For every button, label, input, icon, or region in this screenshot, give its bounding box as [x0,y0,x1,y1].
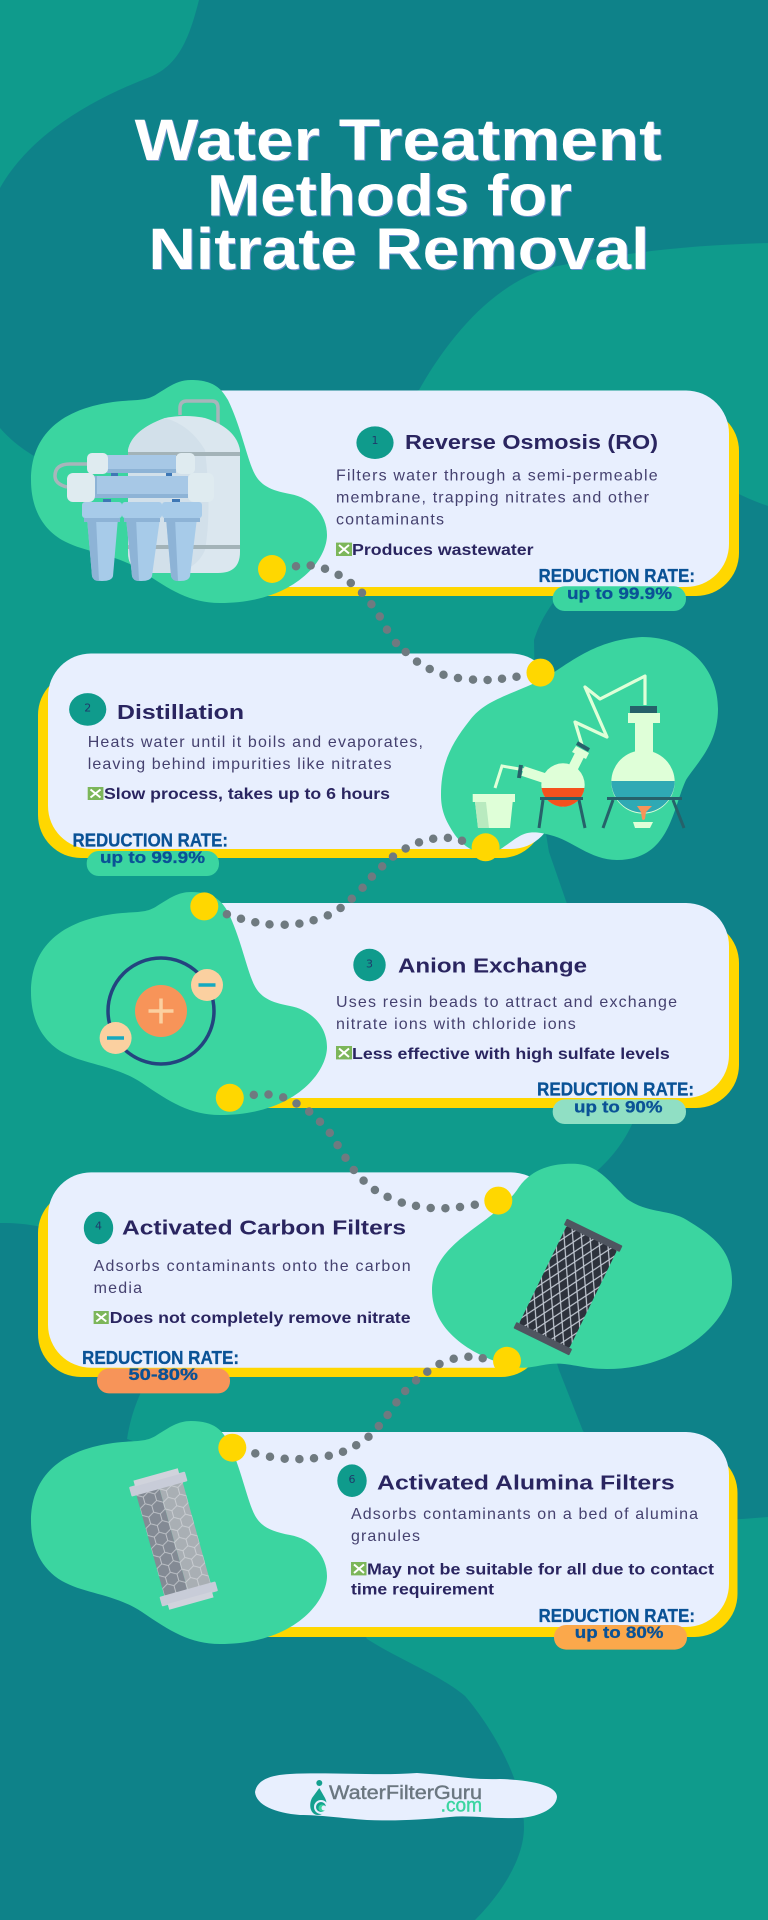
reduction rate: REDUCTION RATE: [538,1606,695,1626]
description [351,1506,698,1545]
reduction rate [72,830,228,876]
drawback: Less effective with high sulfate levels [352,1046,670,1063]
heading: 4 [95,1220,102,1233]
footer logo [255,1773,557,1820]
description: contaminants [336,512,444,529]
description [94,1258,411,1297]
reduction rate: 50-80% [128,1365,198,1384]
title [135,108,662,282]
heading: Anion Exchange [398,956,587,978]
logo wordmark: .com [441,1796,482,1817]
card background [150,903,739,1108]
reduction rate: up to 80% [575,1623,664,1642]
icon: carbon filter cartridge [513,1219,623,1355]
card background [38,654,554,858]
reduction rate: up to 90% [574,1098,662,1116]
heading: 2 [84,701,91,714]
icon: alumina filter cartridge [128,1467,219,1611]
description: leaving behind impurities like nitrates [88,756,391,773]
drawback: Produces wastewater [352,542,534,559]
description: nitrate ions with chloride ions [336,1016,576,1033]
logo wordmark [329,1783,482,1817]
drawback: Slow process, takes up to 6 hours [104,786,390,803]
connector: step 1 to step 2 [258,555,554,687]
heading: Activated Alumina Filters [377,1473,675,1495]
drawback: time requirement [351,1582,494,1599]
description: granules [351,1528,420,1545]
reduction rate: REDUCTION RATE: [72,830,228,850]
panel: distillation [38,637,718,876]
title: Nitrate Removal [148,217,649,282]
logo wordmark: WaterFilterGuru [329,1783,482,1804]
icon: reverse osmosis system [55,401,240,581]
connector: step 3 to step 4 [216,1084,512,1215]
panel: anion exchange [31,892,739,1124]
background: top-left light shape [0,0,199,188]
reduction rate [82,1348,239,1393]
card background [150,390,739,596]
reduction rate: REDUCTION RATE: [82,1348,239,1368]
reduction rate [538,1606,695,1650]
logo icon [310,1780,327,1815]
description [336,994,677,1033]
drawback [351,1562,714,1599]
card background [38,1172,554,1377]
connector: step 2 to step 3 [190,833,500,925]
description: Adsorbs contaminants on a bed of alumina [351,1506,698,1523]
description: Filters water through a semi-permeable [336,468,658,485]
logo background [255,1773,557,1820]
heading: 3 [366,958,373,971]
drawback: Does not completely remove nitrate [110,1310,411,1327]
drawback: May not be suitable for all due to contact [367,1562,714,1579]
heading: 6 [348,1473,356,1486]
heading [337,1464,675,1497]
reduction rate: up to 99.9% [567,584,672,603]
panel: activated alumina filters [31,1421,738,1650]
panel: activated carbon filters [38,1164,732,1393]
description: membrane, trapping nitrates and other [336,490,650,507]
description: Adsorbs contaminants onto the carbon [94,1258,411,1275]
connector: step 4 to step 5 [218,1347,521,1462]
heading [356,426,658,459]
blob [432,1164,732,1369]
reduction rate: up to 99.9% [100,848,205,867]
heading [84,1212,406,1244]
icon: distillation glassware [473,676,684,828]
reduction rate: REDUCTION RATE: [538,566,695,586]
blob [31,380,327,603]
description [88,734,423,773]
heading [69,693,244,726]
blob [31,1421,327,1644]
heading: Distillation [117,702,244,724]
title: Methods for [207,163,572,228]
heading: 1 [372,434,378,447]
panel: reverse osmosis [31,380,739,611]
heading: Reverse Osmosis (RO) [405,432,658,454]
description: Uses resin beads to attract and exchange [336,994,677,1011]
reduction rate [537,1080,694,1124]
description [336,468,658,529]
description: Heats water until it boils and evaporates, [88,734,423,751]
heading: Activated Carbon Filters [122,1218,406,1240]
heading [353,949,587,981]
reduction rate [538,566,695,611]
blob [31,892,327,1115]
card background [150,1432,738,1637]
icon: ion with orbit [100,958,223,1064]
description: media [94,1280,142,1297]
reduction rate: REDUCTION RATE: [537,1080,694,1100]
title: Water Treatment [135,108,662,173]
blob [441,637,718,860]
